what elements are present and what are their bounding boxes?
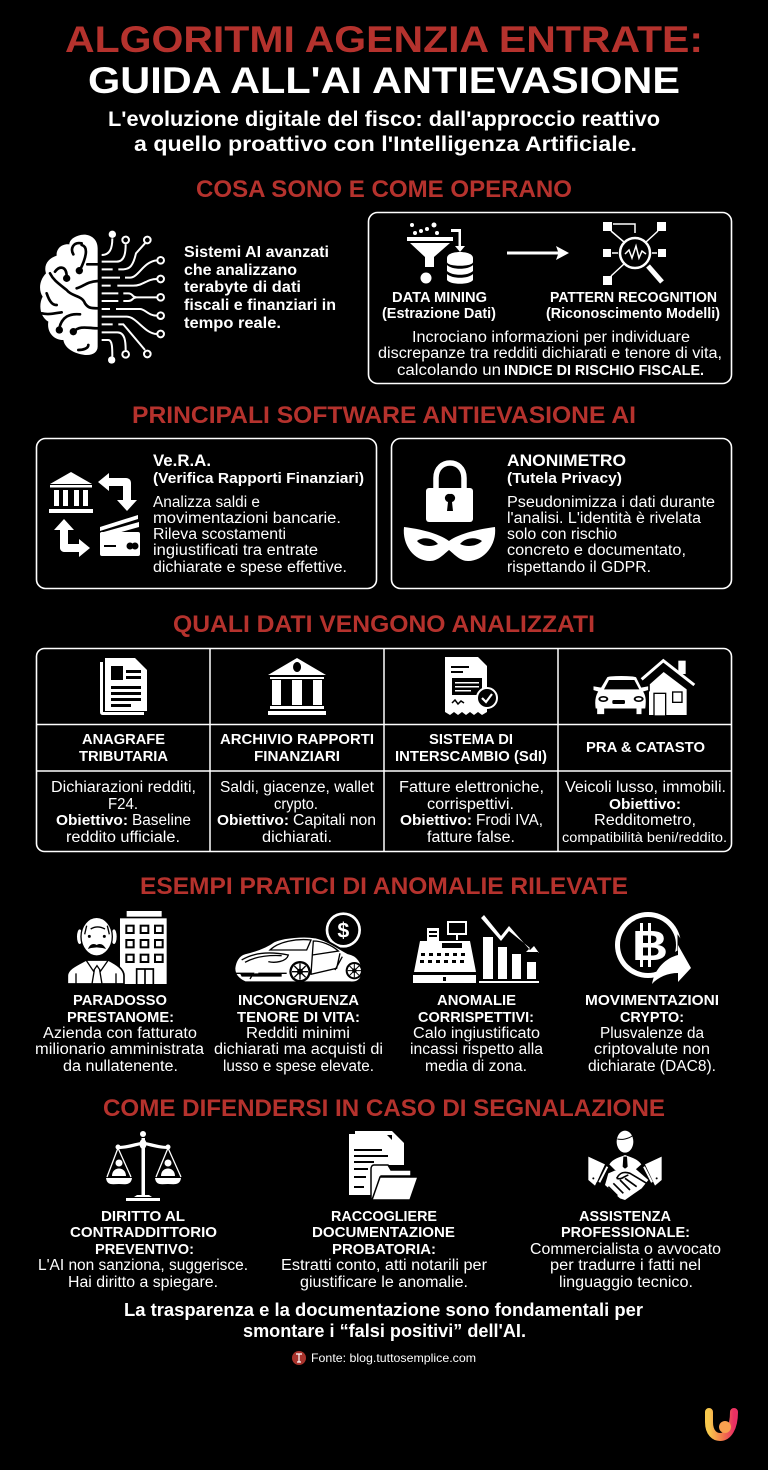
text: movimentazioni: Plusvalenze da xyxy=(600,1025,704,1042)
icon: brain circuit xyxy=(40,231,164,364)
subtitle xyxy=(108,108,660,156)
text: anonimetro description: solo con rischio xyxy=(507,526,617,543)
column 1 text: TRIBUTARIA xyxy=(79,748,168,765)
labels: data mining: DATA MINING xyxy=(392,289,487,306)
description: Incrociano informazioni per individuare xyxy=(412,329,690,346)
description: INDICE DI RISCHIO FISCALE. xyxy=(504,362,704,379)
column 2 text: Saldi, giacenze, wallet xyxy=(220,779,375,796)
panel: anonimetro xyxy=(392,438,732,588)
text: assistenza: Commercialista o avvocato xyxy=(530,1241,721,1258)
icon: handshake professional xyxy=(588,1131,662,1200)
icon: lock and mask xyxy=(404,463,495,561)
text: anonimetro description: rispettando il GDPR. xyxy=(507,559,651,576)
text: anomalie: ANOMALIE xyxy=(437,992,516,1009)
text: assistenza: ASSISTENZA xyxy=(579,1208,671,1225)
heading: difendersi: COME DIFENDERSI IN CASO DI SEGNALAZIONE xyxy=(103,1095,665,1122)
table: data sources xyxy=(36,648,732,852)
text: sistemi AI: fiscali e finanziari in xyxy=(184,297,336,314)
description: calcolando un xyxy=(397,362,501,379)
text: vera name xyxy=(153,452,364,487)
text: documentazione xyxy=(281,1208,487,1291)
column 3 text: fatture false. xyxy=(427,829,515,846)
subtitle: a quello proattivo con l'Intelligenza Artificiale. xyxy=(134,133,637,156)
text: sistemi AI: tempo reale. xyxy=(184,315,281,332)
text: anomalie: media di zona. xyxy=(425,1058,527,1075)
icon: sports car and coin: $ xyxy=(337,919,349,943)
text: incongruenza: INCONGRUENZA xyxy=(238,992,359,1009)
text: vera name: (Verifica Rapporti Finanziari) xyxy=(153,470,364,487)
column 1 text xyxy=(51,731,196,846)
column 2 text: dichiarati. xyxy=(262,829,332,846)
closing statement: smontare i “falsi positivi” dell'AI. xyxy=(243,1320,526,1341)
icon: bank xyxy=(268,658,326,715)
column 3 text xyxy=(395,731,547,846)
column 1 text: Obiettivo: xyxy=(56,812,128,829)
column 2 text: crypto. xyxy=(274,796,318,813)
panel: vera xyxy=(36,438,376,588)
text: paradosso: Azienda con fatturato xyxy=(43,1025,197,1042)
text: vera description: Analizza saldi e xyxy=(153,494,260,511)
column 4 text: Redditometro, xyxy=(594,812,696,829)
column 3 text: corrispettivi. xyxy=(427,796,514,813)
icon: receipt with check xyxy=(445,657,497,715)
labels: pattern recognition xyxy=(546,289,720,322)
panel: data mining and pattern recognition xyxy=(368,212,732,384)
text: documentazione: RACCOGLIERE xyxy=(331,1208,437,1225)
text: anonimetro description: concreto e documentato, xyxy=(507,542,686,559)
icon: pattern recognition xyxy=(603,222,666,285)
text: movimentazioni: dichiarate (DAC8). xyxy=(588,1058,716,1075)
labels: pattern recognition: PATTERN RECOGNITION xyxy=(550,289,717,306)
text: paradosso: PARADOSSO xyxy=(73,992,167,1009)
text: anonimetro description: Pseudonimizza i dati durante xyxy=(507,494,715,511)
text: anonimetro name: (Tutela Privacy) xyxy=(507,470,622,487)
column 1 text: ANAGRAFE xyxy=(82,731,165,748)
icon: documents and folder xyxy=(349,1131,418,1200)
text: sistemi AI: Sistemi AI avanzati xyxy=(184,244,329,261)
text: vera description xyxy=(153,494,347,576)
text: documentazione: PROBATORIA: xyxy=(332,1241,436,1258)
column 2 text: Obiettivo: xyxy=(217,812,289,829)
text: anomalie: incassi rispetto alla xyxy=(410,1041,543,1058)
icon: funnel and database xyxy=(407,222,473,284)
column 4 text xyxy=(562,739,727,845)
text: sistemi AI xyxy=(184,244,336,332)
text: vera description: movimentazioni bancarie. xyxy=(153,510,341,527)
text: contraddittorio: DIRITTO AL xyxy=(101,1208,185,1225)
text: paradosso xyxy=(35,992,204,1075)
text: movimentazioni: criptovalute non xyxy=(594,1041,710,1058)
text: contraddittorio: L'AI non sanziona, suggerisce. xyxy=(38,1257,248,1274)
column 1 text: Dichiarazioni redditi, xyxy=(51,779,196,796)
text: sistemi AI: terabyte di dati xyxy=(184,279,301,296)
column 3 text: SISTEMA DI xyxy=(429,731,513,748)
text: anonimetro name xyxy=(507,452,626,487)
text: incongruenza: Redditi minimi xyxy=(246,1025,350,1042)
column 2 text: FINANZIARI xyxy=(254,748,340,765)
text: documentazione: DOCUMENTAZIONE xyxy=(312,1224,455,1241)
title xyxy=(65,19,703,101)
text: incongruenza xyxy=(214,992,383,1075)
example: paradosso prestanome xyxy=(35,911,204,1075)
description xyxy=(378,329,722,379)
heading: esempi: ESEMPI PRATICI DI ANOMALIE RILEVATE xyxy=(140,873,628,900)
icon: scales xyxy=(106,1131,181,1201)
text: contraddittorio: Hai diritto a spiegare. xyxy=(68,1274,218,1291)
text: sistemi AI: che analizzano xyxy=(184,262,297,279)
text: contraddittorio: PREVENTIVO: xyxy=(95,1241,194,1258)
column 2 text xyxy=(217,731,376,846)
text: vera description: ingiustificati tra entrate xyxy=(153,542,318,559)
text: vera name: Ve.R.A. xyxy=(153,452,211,470)
heading: software: PRINCIPALI SOFTWARE ANTIEVASIONE AI xyxy=(132,402,636,429)
arrow xyxy=(507,246,569,260)
column 4 text: PRA & CATASTO xyxy=(586,739,705,756)
text: vera description: dichiarate e spese effettive. xyxy=(153,559,347,576)
column 4 text: Obiettivo: xyxy=(609,796,681,813)
labels: pattern recognition: (Riconoscimento Modelli) xyxy=(546,305,720,322)
text: anomalie: CORRISPETTIVI: xyxy=(418,1009,534,1026)
column 3 text: Frodi IVA, xyxy=(476,812,543,829)
icon: man and building xyxy=(67,911,167,984)
example: movimentazioni crypto xyxy=(585,912,719,1075)
text: paradosso: da nullatenente. xyxy=(63,1058,178,1075)
text: movimentazioni: MOVIMENTAZIONI xyxy=(585,992,719,1009)
column 2 text: ARCHIVIO RAPPORTI xyxy=(220,731,374,748)
icon: bitcoin with arrow: B xyxy=(632,922,668,969)
text: documentazione: giustificare le anomalie. xyxy=(300,1274,468,1291)
source: Fonte: blog.tuttosemplice.com xyxy=(311,1351,476,1365)
text: documentazione: Estratti conto, atti notarili per xyxy=(281,1257,487,1274)
column 3 text: Fatture elettroniche, xyxy=(399,779,544,796)
column 3 text: INTERSCAMBIO (SdI) xyxy=(395,748,547,765)
defense: documentazione xyxy=(281,1131,487,1291)
closing statement: La trasparenza e la documentazione sono fondamentali per xyxy=(124,1299,643,1320)
column 3 text: Obiettivo: xyxy=(400,812,472,829)
icon: sports car and coin xyxy=(234,912,363,983)
closing statement xyxy=(124,1299,643,1341)
text: assistenza: linguaggio tecnico. xyxy=(559,1274,693,1291)
text: assistenza: PROFESSIONALE: xyxy=(561,1224,690,1241)
text: incongruenza: TENORE DI VITA: xyxy=(237,1009,360,1026)
icon: bank with arrows and cards xyxy=(49,472,140,557)
text: anonimetro description xyxy=(507,494,715,576)
icon: cash register and falling chart xyxy=(413,915,539,983)
example: incongruenza tenore di vita xyxy=(214,912,383,1075)
column 4 text: compatibilità beni/reddito. xyxy=(562,830,727,845)
heading: dati: QUALI DATI VENGONO ANALIZZATI xyxy=(173,611,595,638)
text: paradosso: milionario amministrata xyxy=(35,1041,204,1058)
defense: contraddittorio xyxy=(38,1131,248,1291)
text: assistenza xyxy=(530,1208,721,1291)
column 1 text: Baseline xyxy=(132,812,191,829)
labels: data mining xyxy=(382,289,496,322)
text: incongruenza: lusso e spese elevate. xyxy=(223,1058,374,1075)
text: movimentazioni: CRYPTO: xyxy=(620,1009,684,1026)
text: movimentazioni xyxy=(585,992,719,1075)
title: GUIDA ALL'AI ANTIEVASIONE xyxy=(88,60,680,101)
icon: car and house xyxy=(593,661,694,716)
subtitle: L'evoluzione digitale del fisco: dall'approccio reattivo xyxy=(108,108,660,131)
column 4 text: Veicoli lusso, immobili. xyxy=(565,779,726,796)
text: contraddittorio: CONTRADDITTORIO xyxy=(70,1224,217,1241)
icon: documents xyxy=(100,658,147,715)
text: anonimetro name: ANONIMETRO xyxy=(507,452,626,470)
text: anomalie: Calo ingiustificato xyxy=(413,1025,540,1042)
example: anomalie corrispettivi xyxy=(410,915,543,1075)
icon: bitcoin with arrow xyxy=(615,912,700,986)
heading: cosa sono: COSA SONO E COME OPERANO xyxy=(196,176,572,203)
column 1 text: F24. xyxy=(108,796,138,813)
text: vera description: Rileva scostamenti xyxy=(153,526,286,543)
text: contraddittorio xyxy=(38,1208,248,1291)
column 2 text: Capitali non xyxy=(293,812,376,829)
text: paradosso: PRESTANOME: xyxy=(67,1009,174,1026)
text: anonimetro description: l'analisi. L'identità è rivelata xyxy=(507,510,701,527)
logo xyxy=(709,1412,734,1437)
title: ALGORITMI AGENZIA ENTRATE: xyxy=(65,19,703,60)
description: discrepanze tra redditi dichiarati e tenore di vita, xyxy=(378,345,722,362)
text: assistenza: per tradurre i fatti nel xyxy=(550,1257,701,1274)
column 1 text: reddito ufficiale. xyxy=(66,829,180,846)
defense: assistenza xyxy=(530,1131,721,1291)
text: incongruenza: dichiarati ma acquisti di xyxy=(214,1041,383,1058)
text: anomalie xyxy=(410,992,543,1075)
labels: data mining: (Estrazione Dati) xyxy=(382,305,496,322)
